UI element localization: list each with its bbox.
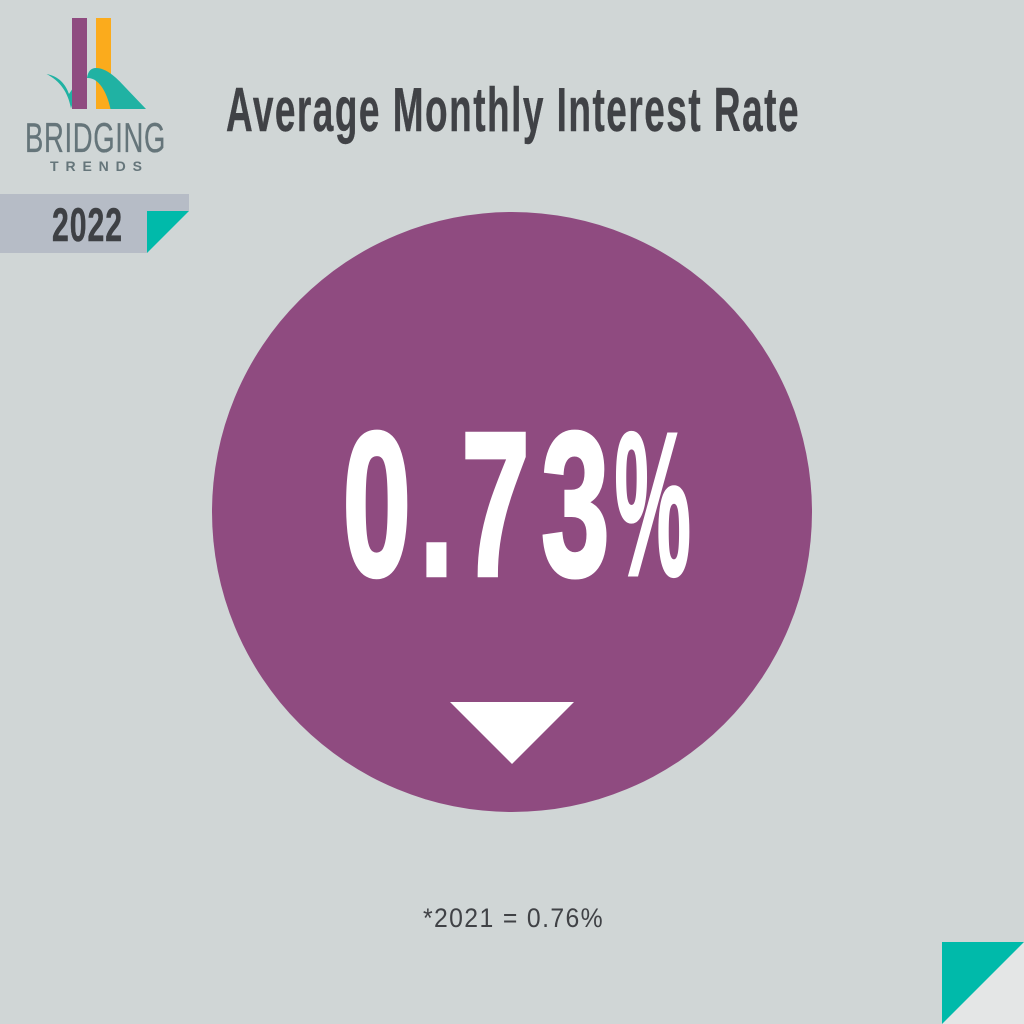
- logo icon: purple bar: [72, 18, 87, 109]
- logo: Bridging Trends: [25, 18, 166, 174]
- banner year: 2022: [52, 198, 123, 251]
- main value: %: [614, 391, 691, 619]
- logo icon: teal small curve: [46, 74, 73, 108]
- logo icon: teal bridge arch: [87, 68, 146, 109]
- logo wordmark: BRIDGING: BRIDGING: [25, 114, 166, 161]
- banner teal triangle: [147, 211, 189, 253]
- logo wordmark: TRENDS: TRENDS: [50, 158, 142, 174]
- year banner: [0, 194, 189, 253]
- footnote: *2021 = 0.76%: [423, 903, 604, 933]
- corner light triangle: [942, 942, 1024, 1024]
- main value: 0.73: [343, 389, 610, 619]
- logo icon: orange bar: [96, 18, 111, 109]
- purple circle: [212, 212, 812, 812]
- banner background: [0, 194, 189, 253]
- corner teal triangle: [942, 942, 1024, 1024]
- down arrow: [450, 702, 574, 764]
- corner fold: [942, 942, 1024, 1024]
